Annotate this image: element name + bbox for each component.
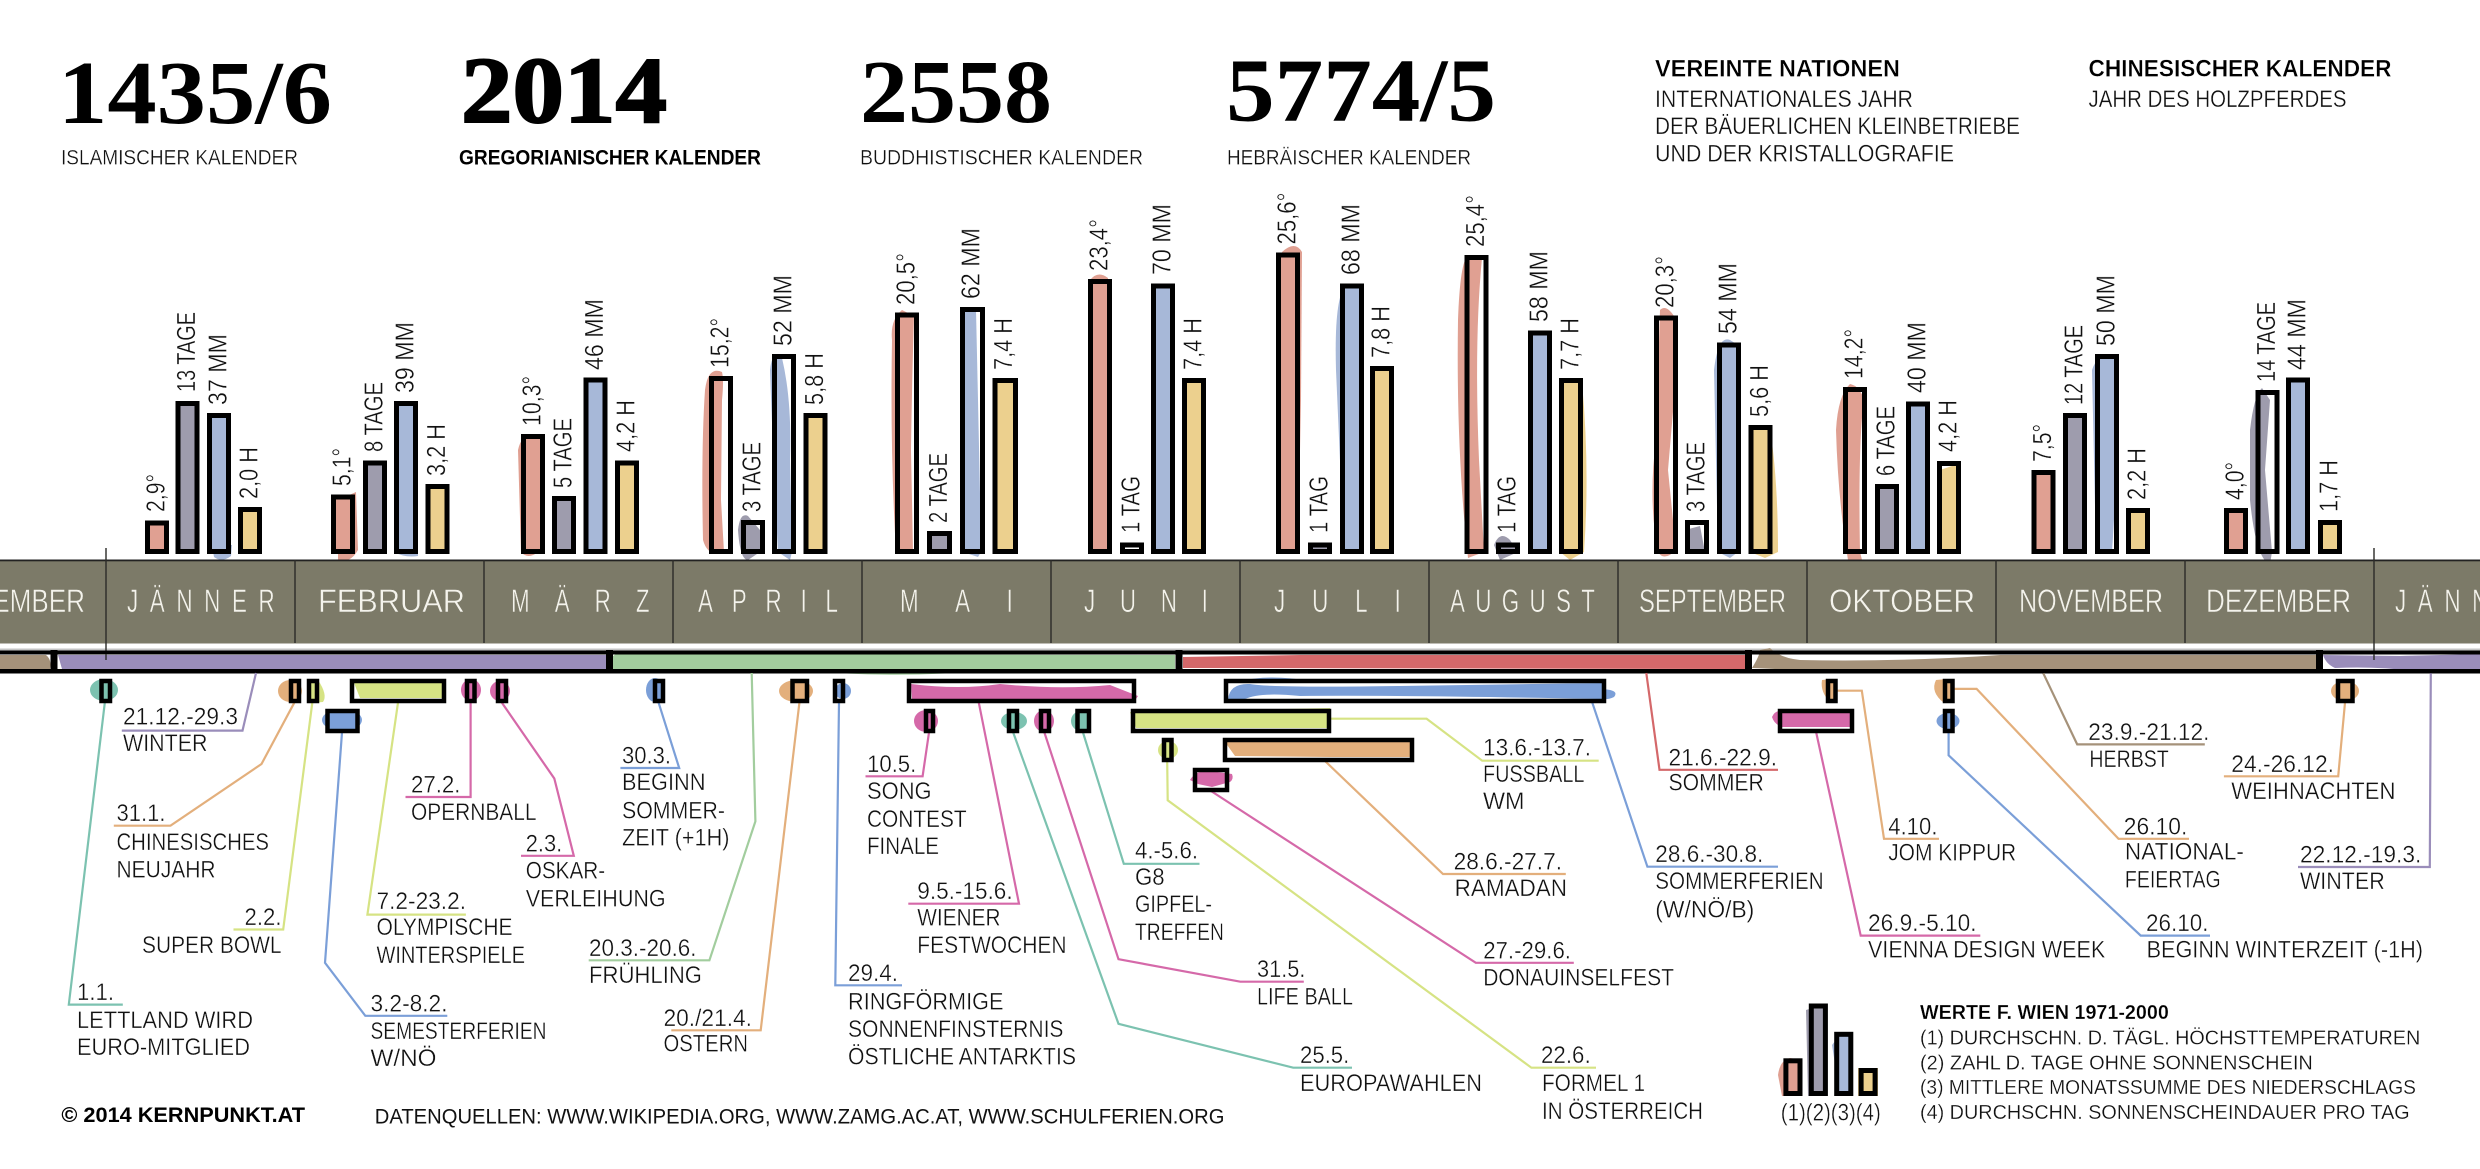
season strip bbox=[0, 648, 2480, 675]
event: European elections: EUROPAWAHLEN bbox=[1300, 1070, 1482, 1097]
chart: February climate bars: 5,1° bbox=[326, 448, 356, 486]
heading: Gregorian calendar: 2014 bbox=[461, 39, 667, 143]
event: Oscars bbox=[490, 681, 666, 913]
event: Spring: FRÜHLING bbox=[589, 962, 702, 989]
event: Winter Olympics: WINTERSPIELE bbox=[376, 942, 525, 969]
event: Daylight saving begins: SOMMER- bbox=[622, 797, 725, 824]
chart: January climate bars: 37 MM bbox=[202, 334, 232, 405]
event: Ramadan: RAMADAN bbox=[1455, 875, 1567, 902]
event: Daylight saving begins bbox=[620, 678, 730, 852]
event: Winter start of year: 21.12.-29.3 bbox=[123, 704, 238, 730]
event: Opera ball bbox=[406, 679, 536, 826]
chart: May climate bars bbox=[890, 228, 1018, 557]
event: Winter start of year bbox=[122, 673, 256, 757]
event: Song Contest final: FINALE bbox=[867, 833, 939, 860]
heading: Chinese calendar: CHINESISCHER KALENDER bbox=[2088, 56, 2392, 82]
event: Solar eclipse: SONNENFINSTERNIS bbox=[848, 1016, 1064, 1043]
event: Summer holidays bbox=[1226, 678, 1824, 924]
event: Winter Olympics bbox=[352, 681, 525, 969]
event: Easter bbox=[664, 680, 813, 1058]
event: Semester holidays: SEMESTERFERIEN bbox=[370, 1018, 546, 1045]
event: Song Contest final: 10.5. bbox=[867, 751, 916, 778]
event: Solar eclipse bbox=[835, 681, 1076, 1070]
chart: March climate bars: 10,3° bbox=[516, 376, 546, 426]
heading: Buddhist calendar: 2558 bbox=[860, 43, 1052, 142]
event: Song Contest final: SONG bbox=[867, 778, 932, 805]
month band: MÄRZ bbox=[511, 583, 650, 619]
chart: April climate bars: 52 MM bbox=[768, 275, 798, 346]
event: Chinese New Year: NEUJAHR bbox=[116, 856, 216, 884]
event: Summer holidays: (W/NÖ/B) bbox=[1655, 896, 1754, 924]
heading: Islamic calendar: ISLAMISCHER KALENDER bbox=[61, 146, 298, 170]
chart: February climate bars bbox=[326, 322, 451, 561]
legend: text: (1) DURCHSCHN. D. TÄGL. HÖCHSTTEMPERATUREN bbox=[1920, 1026, 2420, 1050]
heading: United Nations year bbox=[1655, 56, 2020, 168]
event: Yom Kippur: 4.10. bbox=[1888, 813, 1938, 840]
chart: December climate bars: 4,0° bbox=[2220, 462, 2250, 500]
event: Vienna Design Week: 26.9.-5.10. bbox=[1868, 910, 1977, 937]
event: Football World Cup: FUSSBALL bbox=[1483, 761, 1584, 788]
event: National holiday: 26.10. bbox=[2124, 813, 2187, 840]
event: Latvia joins euro: 1.1. bbox=[77, 979, 114, 1006]
event: Autumn bbox=[2043, 673, 2210, 773]
heading: United Nations year: DER BÄUERLICHEN KLEINBETRIEBE bbox=[1655, 113, 2020, 140]
event: Christmas: WEIHNACHTEN bbox=[2231, 778, 2395, 805]
event: Daylight saving begins: 30.3. bbox=[622, 742, 671, 770]
event: Vienna Design Week: VIENNA DESIGN WEEK bbox=[1868, 936, 2105, 963]
chart: May climate bars: 7,4 H bbox=[988, 318, 1018, 370]
chart: November climate bars bbox=[2027, 275, 2152, 552]
chart: May climate bars: 20,5° bbox=[890, 253, 920, 305]
event: National holiday: NATIONAL- bbox=[2125, 838, 2244, 865]
event: Summer holidays: 28.6.-30.8. bbox=[1655, 841, 1763, 868]
chart: August climate bars bbox=[1458, 195, 1587, 560]
heading: Chinese calendar bbox=[2088, 56, 2392, 113]
chart: December climate bars: 1,7 H bbox=[2314, 460, 2344, 512]
heading: United Nations year: INTERNATIONALES JAHR bbox=[1655, 86, 1913, 113]
chart: January climate bars: 2,9° bbox=[140, 474, 170, 512]
event: Winter Olympics: 7.2-23.2. bbox=[376, 888, 466, 915]
chart: June climate bars: 70 MM bbox=[1146, 204, 1176, 275]
event: Spring bbox=[589, 673, 755, 989]
chart: September climate bars: 20,3° bbox=[1650, 256, 1680, 308]
chart: April climate bars: 5,8 H bbox=[799, 353, 829, 405]
legend: text: (2) ZAHL D. TAGE OHNE SONNENSCHEIN bbox=[1920, 1052, 2313, 1074]
event: Life Ball bbox=[1034, 710, 1353, 1011]
event: Football World Cup: WM bbox=[1483, 788, 1524, 815]
event: Ramadan: 28.6.-27.7. bbox=[1454, 848, 1562, 876]
event: Yom Kippur: JOM KIPPUR bbox=[1888, 840, 2016, 866]
legend: sample bars: (1)(2)(3)(4) bbox=[1781, 1100, 1881, 1127]
chart: December climate bars: 44 MM bbox=[2282, 299, 2312, 370]
event: Summer: SOMMER bbox=[1668, 770, 1764, 796]
event: Easter: 20./21.4. bbox=[664, 1005, 752, 1032]
chart: November climate bars: 2,2 H bbox=[2122, 448, 2152, 500]
event: Football World Cup bbox=[1130, 708, 1599, 815]
event: Formula 1 in Austria: IN ÖSTERREICH bbox=[1542, 1098, 1703, 1125]
event: Song Contest final bbox=[866, 710, 967, 860]
event: Semester holidays: W/NÖ bbox=[370, 1045, 436, 1072]
event: Wiener Festwochen: FESTWOCHEN bbox=[917, 932, 1067, 959]
event: National holiday: FEIERTAG bbox=[2125, 867, 2221, 894]
heading: Hebrew calendar: HEBRÄISCHER KALENDER bbox=[1227, 146, 1471, 170]
heading: Islamic calendar: 1435/6 bbox=[58, 44, 332, 143]
chart: March climate bars: 46 MM bbox=[579, 299, 609, 370]
event: Oscars: 2.3. bbox=[526, 830, 562, 857]
chart: July climate bars bbox=[1272, 192, 1396, 552]
chart: October climate bars: 40 MM bbox=[1902, 322, 1932, 393]
event: Winter Olympics: OLYMPISCHE bbox=[376, 914, 512, 941]
chart: September climate bars: 54 MM bbox=[1712, 263, 1742, 334]
chart: February climate bars: 3,2 H bbox=[421, 424, 451, 476]
event: G8 summit: 4.-5.6. bbox=[1135, 838, 1198, 864]
chart: November climate bars: 7,5° bbox=[2027, 424, 2057, 462]
event: Football World Cup: 13.6.-13.7. bbox=[1483, 734, 1591, 762]
chart: July climate bars: 1 TAG bbox=[1304, 476, 1334, 533]
chart: September climate bars bbox=[1650, 256, 1778, 558]
chart: April climate bars: 3 TAGE bbox=[736, 442, 766, 512]
event: Life Ball: 31.5. bbox=[1257, 956, 1305, 983]
event: Wiener Festwochen: 9.5.-15.6. bbox=[917, 878, 1013, 905]
chart: March climate bars: 4,2 H bbox=[610, 400, 640, 452]
legend: text bbox=[1920, 1001, 2420, 1124]
legend: text: WERTE F. WIEN 1971-2000 bbox=[1920, 1001, 2169, 1024]
month band: SEPTEMBER bbox=[1639, 583, 1786, 619]
event: Vienna Design Week bbox=[1772, 711, 2105, 963]
heading: Gregorian calendar bbox=[459, 39, 761, 170]
chart: October climate bars: 6 TAGE bbox=[1870, 406, 1900, 476]
month band: JULI bbox=[1274, 583, 1401, 619]
chart: October climate bars: 14,2° bbox=[1838, 329, 1868, 379]
event: Daylight saving begins: ZEIT (+1H) bbox=[622, 825, 730, 852]
event: European elections bbox=[1001, 711, 1482, 1097]
event: Winter time begins bbox=[1936, 711, 2423, 963]
chart: February climate bars: 39 MM bbox=[390, 322, 420, 393]
event: Semester holidays: 3.2-8.2. bbox=[370, 990, 448, 1017]
chart: October climate bars bbox=[1836, 322, 1962, 560]
event: Donauinselfest: 27.-29.6. bbox=[1483, 937, 1571, 964]
event: G8 summit: G8 bbox=[1135, 864, 1165, 891]
chart: August climate bars: 25,4° bbox=[1460, 195, 1490, 247]
month band: APRIL bbox=[698, 583, 838, 619]
chart: October climate bars: 4,2 H bbox=[1932, 400, 1962, 452]
month band: AUGUST bbox=[1450, 583, 1595, 619]
event: National holiday bbox=[1934, 679, 2244, 894]
event: Super Bowl bbox=[142, 680, 325, 959]
chart: June climate bars: 1 TAG bbox=[1116, 476, 1146, 533]
data sources: DATENQUELLEN: WWW.WIKIPEDIA.ORG, WWW.ZAMG.AC.AT, WWW.SCHULFERIEN.ORG bbox=[375, 1105, 1224, 1129]
event: Life Ball: LIFE BALL bbox=[1257, 984, 1353, 1011]
legend: sample bars bbox=[1778, 1004, 1881, 1127]
event: Formula 1 in Austria: 22.6. bbox=[1541, 1042, 1591, 1069]
month band: FEBRUAR bbox=[318, 583, 465, 619]
heading: Hebrew calendar: 5774/5 bbox=[1226, 42, 1496, 140]
event: Wiener Festwochen: WIENER bbox=[917, 904, 1000, 932]
month band: DEZEMBER bbox=[2206, 583, 2351, 619]
copyright: © 2014 KERNPUNKT.AT bbox=[61, 1104, 305, 1127]
event: Easter: OSTERN bbox=[664, 1030, 748, 1058]
event: Winter start of year: WINTER bbox=[123, 730, 208, 757]
event: Opera ball: OPERNBALL bbox=[411, 799, 536, 826]
event: Solar eclipse: RINGFÖRMIGE bbox=[848, 988, 1004, 1015]
chart: August climate bars: 7,7 H bbox=[1554, 318, 1584, 370]
chart: April climate bars bbox=[702, 275, 829, 560]
chart: March climate bars bbox=[516, 299, 640, 556]
event: Formula 1 in Austria: FORMEL 1 bbox=[1542, 1070, 1645, 1097]
chart: November climate bars: 50 MM bbox=[2090, 275, 2120, 346]
event: Winter time begins: BEGINN WINTERZEIT (-1H) bbox=[2147, 936, 2423, 963]
chart: January climate bars: 13 TAGE bbox=[171, 312, 201, 392]
event: Oscars: OSKAR- bbox=[526, 858, 605, 885]
month band: OKTOBER bbox=[1829, 583, 1975, 619]
chart: May climate bars: 2 TAGE bbox=[923, 453, 953, 523]
chart: July climate bars: 7,8 H bbox=[1366, 306, 1396, 358]
event: Donauinselfest bbox=[1190, 770, 1674, 991]
event: European elections: 25.5. bbox=[1300, 1042, 1349, 1069]
event: Summer bbox=[1646, 673, 1778, 796]
chart: January climate bars: 2,0 H bbox=[234, 447, 264, 499]
event: Solar eclipse: 29.4. bbox=[848, 960, 898, 987]
event: Autumn: 23.9.-21.12. bbox=[2088, 719, 2210, 746]
event: Latvia joins euro: EURO-MITGLIED bbox=[77, 1034, 250, 1061]
chart: September climate bars: 3 TAGE bbox=[1680, 442, 1710, 512]
event: Winter end of year: WINTER bbox=[2300, 868, 2385, 895]
month band: JÄNNER bbox=[127, 583, 275, 619]
chart: December climate bars bbox=[2220, 299, 2344, 564]
event: Latvia joins euro: LETTLAND WIRD bbox=[77, 1007, 253, 1034]
event: Wiener Festwochen bbox=[908, 681, 1138, 959]
chart: September climate bars: 5,6 H bbox=[1744, 365, 1774, 417]
chart: December climate bars: 14 TAGE bbox=[2251, 302, 2281, 382]
chart: July climate bars: 68 MM bbox=[1336, 204, 1366, 275]
event: Summer: 21.6.-22.9. bbox=[1668, 744, 1777, 771]
chart: August climate bars: 1 TAG bbox=[1492, 476, 1522, 533]
heading: United Nations year: UND DER KRISTALLOGRAFIE bbox=[1655, 140, 1954, 168]
event: Semester holidays bbox=[322, 709, 546, 1072]
chart: January climate bars bbox=[140, 312, 264, 560]
month band: MAI bbox=[900, 583, 1013, 619]
heading: Chinese calendar: JAHR DES HOLZPFERDES bbox=[2088, 86, 2346, 113]
event: Super Bowl: SUPER BOWL bbox=[142, 932, 282, 959]
chart: May climate bars: 62 MM bbox=[956, 228, 986, 299]
event: Ramadan bbox=[1225, 740, 1567, 902]
event: Summer holidays: SOMMERFERIEN bbox=[1655, 868, 1824, 895]
month band: JUNI bbox=[1084, 583, 1208, 619]
month band bbox=[0, 548, 2480, 654]
event: Super Bowl: 2.2. bbox=[244, 904, 282, 931]
heading: Buddhist calendar: BUDDHISTISCHER KALENDER bbox=[860, 146, 1143, 170]
event: Autumn: HERBST bbox=[2089, 746, 2169, 773]
chart: February climate bars: 8 TAGE bbox=[358, 382, 388, 452]
event: Daylight saving begins: BEGINN bbox=[622, 769, 706, 796]
event: Christmas: 24.-26.12. bbox=[2231, 751, 2334, 778]
event: Yom Kippur bbox=[1822, 679, 2016, 866]
heading: Gregorian calendar: GREGORIANISCHER KALENDER bbox=[459, 146, 761, 170]
event: Donauinselfest: DONAUINSELFEST bbox=[1483, 964, 1674, 991]
event: G8 summit bbox=[1071, 711, 1224, 946]
heading: Buddhist calendar bbox=[860, 43, 1143, 170]
event: Oscars: VERLEIHUNG bbox=[526, 886, 666, 913]
chart: March climate bars: 5 TAGE bbox=[548, 418, 578, 488]
event: Winter time begins: 26.10. bbox=[2146, 910, 2208, 937]
event: Christmas bbox=[2224, 681, 2395, 805]
event: Formula 1 in Austria bbox=[1158, 740, 1703, 1125]
event: Chinese New Year: 31.1. bbox=[116, 800, 166, 827]
event: Winter end of year: 22.12.-19.3. bbox=[2300, 842, 2421, 868]
chart: August climate bars: 58 MM bbox=[1524, 251, 1554, 322]
event: Chinese New Year: CHINESISCHES bbox=[116, 829, 269, 856]
chart: June climate bars: 23,4° bbox=[1084, 219, 1114, 271]
heading: United Nations year: VEREINTE NATIONEN bbox=[1655, 56, 1900, 82]
event: Latvia joins euro bbox=[69, 679, 253, 1061]
event: Solar eclipse: ÖSTLICHE ANTARKTIS bbox=[848, 1043, 1076, 1070]
event: Spring: 20.3.-20.6. bbox=[589, 935, 696, 962]
chart: April climate bars: 15,2° bbox=[704, 318, 734, 368]
legend: text: (3) MITTLERE MONATSSUMME DES NIEDERSCHLAGS bbox=[1920, 1076, 2416, 1099]
event: Song Contest final: CONTEST bbox=[867, 806, 967, 833]
event: Winter end of year bbox=[2298, 673, 2431, 895]
event: G8 summit: GIPFEL- bbox=[1135, 891, 1212, 918]
chart: November climate bars: 12 TAGE bbox=[2058, 325, 2088, 405]
event: Opera ball: 27.2. bbox=[411, 772, 460, 798]
chart: June climate bars bbox=[1084, 204, 1208, 552]
month band: NOVEMBER bbox=[2019, 583, 2163, 619]
chart: July climate bars: 25,6° bbox=[1272, 192, 1302, 244]
chart: June climate bars: 7,4 H bbox=[1178, 318, 1208, 370]
event: G8 summit: TREFFEN bbox=[1135, 919, 1224, 946]
event: Chinese New Year bbox=[114, 680, 302, 884]
legend: text: (4) DURCHSCHN. SONNENSCHEINDAUER PRO TAG bbox=[1920, 1101, 2410, 1124]
